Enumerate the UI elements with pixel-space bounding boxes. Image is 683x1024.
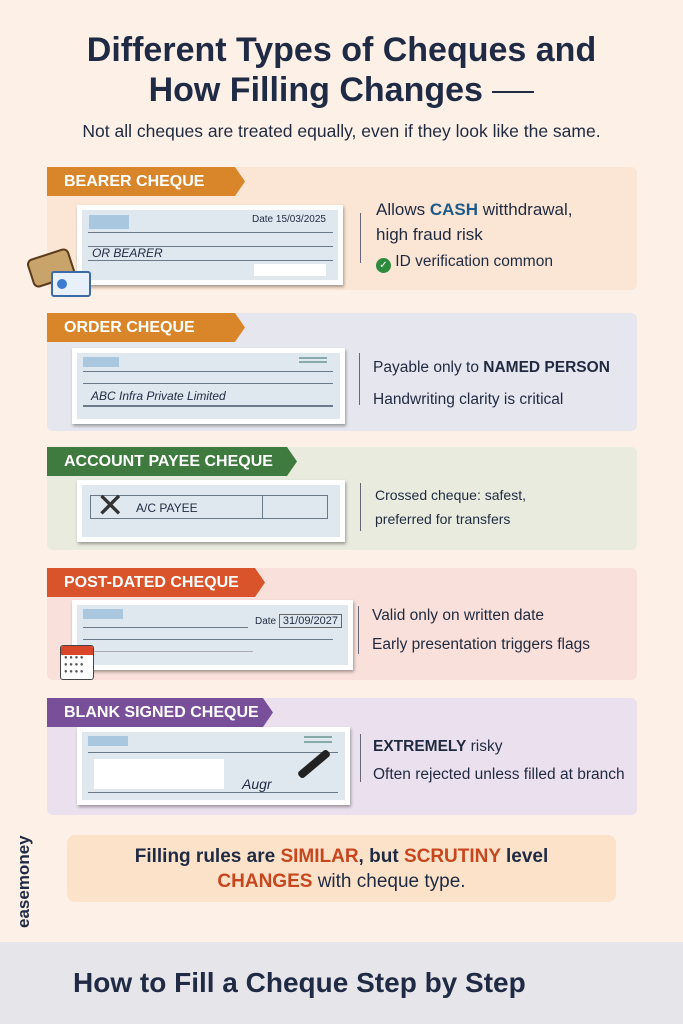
text: account payee: preferred for transfers bbox=[375, 511, 510, 527]
text: order bbox=[373, 359, 610, 408]
cheque: bearer: OR BEARER bbox=[92, 246, 163, 260]
icon: calendar: ● ● ● ● bbox=[64, 669, 84, 675]
panel: blank signed bbox=[47, 698, 637, 815]
cheque: order: ABC Infra Private Limited bbox=[91, 389, 226, 403]
callout: filling rules: CHANGES with cheque type. bbox=[217, 871, 466, 892]
panel: post-dated bbox=[47, 568, 637, 680]
icon: calendar bbox=[60, 645, 94, 680]
cheque: bearer: Date 15/03/2025 bbox=[252, 214, 326, 225]
text: account payee: Crossed cheque: safest, bbox=[375, 487, 526, 503]
cheque: account payee: ✕ bbox=[96, 487, 124, 525]
tab: account payee bbox=[47, 447, 297, 476]
text: post-dated: Valid only on written date bbox=[372, 607, 544, 624]
title: Different Types of Cheques and bbox=[87, 31, 596, 69]
panel: order cheque bbox=[47, 313, 637, 431]
icon+text: id verification: ID verification common bbox=[395, 253, 553, 270]
text: post-dated bbox=[372, 607, 590, 653]
text: post-dated: Early presentation triggers flags bbox=[372, 636, 590, 653]
cheque: order bbox=[72, 348, 345, 424]
tab: blank signed: BLANK SIGNED CHEQUE bbox=[64, 704, 259, 721]
text: bearer bbox=[376, 200, 573, 244]
icon+text: id verification: ✓ bbox=[379, 260, 388, 271]
tab: post-dated: POST-DATED CHEQUE bbox=[64, 574, 239, 591]
panel: account payee bbox=[47, 447, 637, 550]
callout: filling rules bbox=[67, 835, 616, 902]
icon: wallet and id card bbox=[27, 248, 91, 297]
cheque: account payee: A/C PAYEE bbox=[136, 501, 198, 515]
cheque: bearer bbox=[77, 205, 343, 285]
text: bearer: Allows CASH witthdrawal, bbox=[376, 200, 573, 219]
tab: blank signed bbox=[47, 698, 273, 727]
tab: order: ORDER CHEQUE bbox=[64, 319, 195, 336]
panel: bearer cheque bbox=[47, 167, 637, 290]
tab: order bbox=[47, 313, 245, 342]
text: bearer: high fraud risk bbox=[376, 225, 483, 244]
tab: account payee: ACCOUNT PAYEE CHEQUE bbox=[64, 453, 273, 470]
icon: calendar: ● ● ● ● bbox=[64, 662, 84, 668]
cheque: post-dated bbox=[72, 600, 353, 670]
title: How Filling Changes bbox=[149, 71, 483, 109]
text: blank signed: Often rejected unless filled at branch bbox=[373, 766, 625, 783]
text: blank signed bbox=[373, 738, 625, 783]
footer heading: How to Fill a Cheque Step by Step bbox=[73, 967, 526, 998]
tab: post-dated bbox=[47, 568, 265, 597]
tab: bearer: BEARER CHEQUE bbox=[64, 173, 204, 190]
text: order: Handwriting clarity is critical bbox=[373, 391, 563, 408]
text: account payee bbox=[375, 487, 526, 527]
cheque: blank signed bbox=[77, 727, 350, 805]
cheque: blank signed: Augr bbox=[242, 776, 272, 792]
cheque: account payee bbox=[77, 480, 345, 542]
icon: pen bbox=[297, 749, 331, 779]
icon: calendar: ● ● ● ● bbox=[64, 655, 84, 661]
tab: bearer bbox=[47, 167, 245, 196]
text: blank signed: EXTREMELY risky bbox=[373, 738, 502, 755]
footer heading bbox=[0, 942, 683, 1024]
title bbox=[87, 31, 596, 109]
text: order: Payable only to NAMED PERSON bbox=[373, 359, 610, 376]
cheque: post-dated: Date 31/09/2027 bbox=[255, 615, 338, 627]
callout: filling rules: Filling rules are SIMILAR, but SCRUTINY level bbox=[135, 846, 548, 867]
subtitle: Not all cheques are treated equally, even if they look like the same. bbox=[82, 121, 601, 141]
brand: easemoney: easemoney bbox=[14, 835, 33, 928]
